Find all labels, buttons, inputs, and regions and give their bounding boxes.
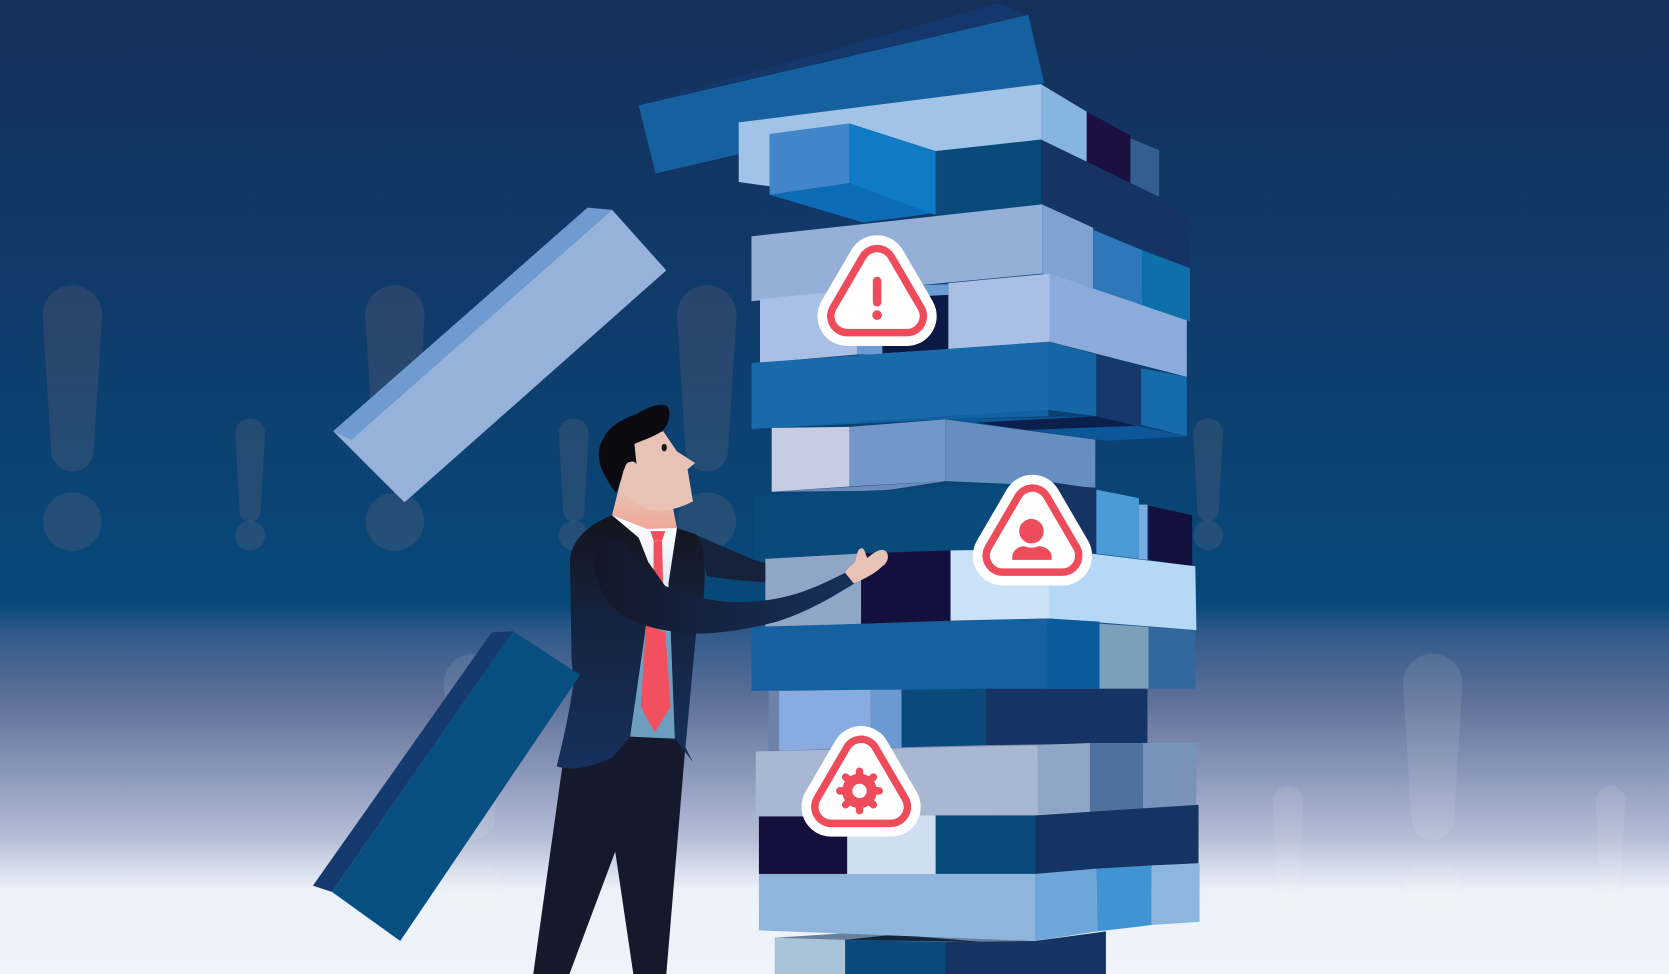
tower: layer 12 dark and pale blocks [759,805,1199,874]
man: face [619,431,695,511]
man: tie [641,531,671,732]
falling block: light upper left [333,208,666,502]
tower: layer 2 blue and navy blocks [770,123,1190,268]
tower: base blocks [775,929,1106,974]
businessman [533,405,888,974]
man: neck [612,481,693,530]
tower: layer 7 teal block [754,482,1192,566]
man: jacket [557,515,705,768]
man: shirt [612,515,677,639]
man: legs [533,734,685,974]
warning icon: exclamation [847,265,907,320]
man: front arm [594,539,855,634]
tower: layer 11 grey blocks [756,743,1196,816]
falling block: dark lower left [313,631,580,941]
tower: layer 1 light block [739,84,1159,197]
background exclamation marks: upper row [43,285,1223,551]
man: eye [662,444,667,451]
tower: layer 9 blue block [751,618,1195,691]
tower: layer 10 blocks [769,689,1147,752]
background exclamation marks: lower row [444,654,1625,919]
tower: layer 4 pale blocks with gap [760,274,1187,377]
man: back arm [697,535,765,582]
tower: layer 3 periwinkle block [751,204,1190,321]
tower: layer 8 mixed blocks [765,549,1196,630]
tower: layer 13 sky blue block [759,863,1200,941]
warning icon: person [1003,505,1062,560]
warning icon: gear [831,756,891,811]
man: ear [625,462,635,477]
man: waistcoat [630,625,677,739]
man: hand [845,548,888,583]
tower: tilted top block [639,3,1044,174]
tower: layer 5 mid blue block [751,342,1187,441]
tower: layer 6 pale and steel blocks [772,419,1095,492]
man: hair [599,405,670,493]
block tower [639,3,1200,974]
